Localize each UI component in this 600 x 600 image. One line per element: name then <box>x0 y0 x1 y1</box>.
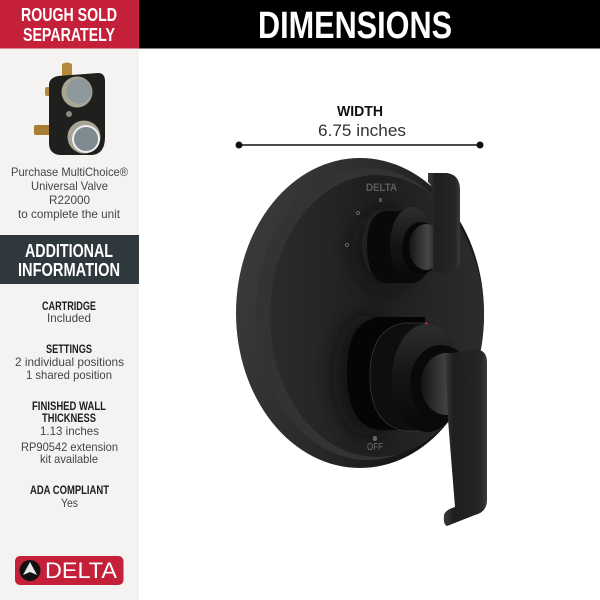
spec: cartridge <box>42 301 96 325</box>
spec: ada compliant: ADA COMPLIANT <box>30 485 109 497</box>
off label <box>367 436 383 453</box>
spec: settings <box>15 344 124 382</box>
spec: cartridge: CARTRIDGE <box>42 301 96 313</box>
spec: settings: 2 individual positions <box>15 355 124 369</box>
trim plate face <box>270 175 484 457</box>
red indicator dot <box>424 322 428 326</box>
spec: finished wall thickness: 1.13 inches <box>40 424 99 438</box>
knob shadows on face <box>330 241 376 435</box>
lower knob <box>347 317 472 432</box>
dimension: width: 6.75 inches <box>318 121 406 140</box>
dimension: width <box>236 103 484 148</box>
banner: rough sold separately <box>0 0 139 48</box>
dimension: width: WIDTH <box>337 103 383 120</box>
lower lever <box>444 349 487 526</box>
banner: additional information <box>0 235 139 284</box>
off label: OFF <box>367 442 383 453</box>
title bar: dimensions <box>139 0 600 48</box>
upper lever <box>428 173 460 274</box>
spec: cartridge: Included <box>47 311 91 325</box>
text: purchase valve note: Universal Valve <box>31 179 108 193</box>
spec: finished wall thickness: THICKNESS <box>42 413 96 425</box>
spec: ada compliant: Yes <box>61 496 78 510</box>
text: purchase valve note: R22000 <box>49 193 90 207</box>
icon: rough-in valve <box>34 62 105 155</box>
spec: finished wall thickness: RP90542 extension <box>21 440 118 454</box>
banner: rough sold separately: ROUGH SOLD <box>21 5 117 25</box>
position markers <box>346 198 382 246</box>
trim plate rim <box>236 158 484 468</box>
logo: delta <box>15 556 124 585</box>
spec: finished wall thickness: kit available <box>40 452 98 466</box>
product: trim plate with two handles <box>236 158 487 526</box>
spec: ada compliant <box>30 485 109 510</box>
upper knob <box>362 207 443 283</box>
sidebar panel <box>0 0 139 600</box>
brand mark on plate: DELTA <box>366 182 397 194</box>
banner: rough sold separately: SEPARATELY <box>23 25 115 45</box>
spec: settings: SETTINGS <box>46 344 92 356</box>
arrow: width line <box>236 142 484 148</box>
spec: finished wall thickness <box>21 401 118 466</box>
logo: delta: DELTA <box>45 558 117 583</box>
spec: finished wall thickness: FINISHED WALL <box>32 401 106 413</box>
rim bevel highlight <box>256 168 480 460</box>
text: purchase valve note: Purchase MultiChoice® <box>11 165 128 179</box>
title bar: dimensions: DIMENSIONS <box>258 5 452 47</box>
banner: additional information: INFORMATION <box>18 260 120 280</box>
text: purchase valve note: to complete the unit <box>18 207 121 221</box>
text: purchase valve note <box>11 165 128 221</box>
spec: settings: 1 shared position <box>26 368 112 382</box>
banner: additional information: ADDITIONAL <box>25 241 113 261</box>
